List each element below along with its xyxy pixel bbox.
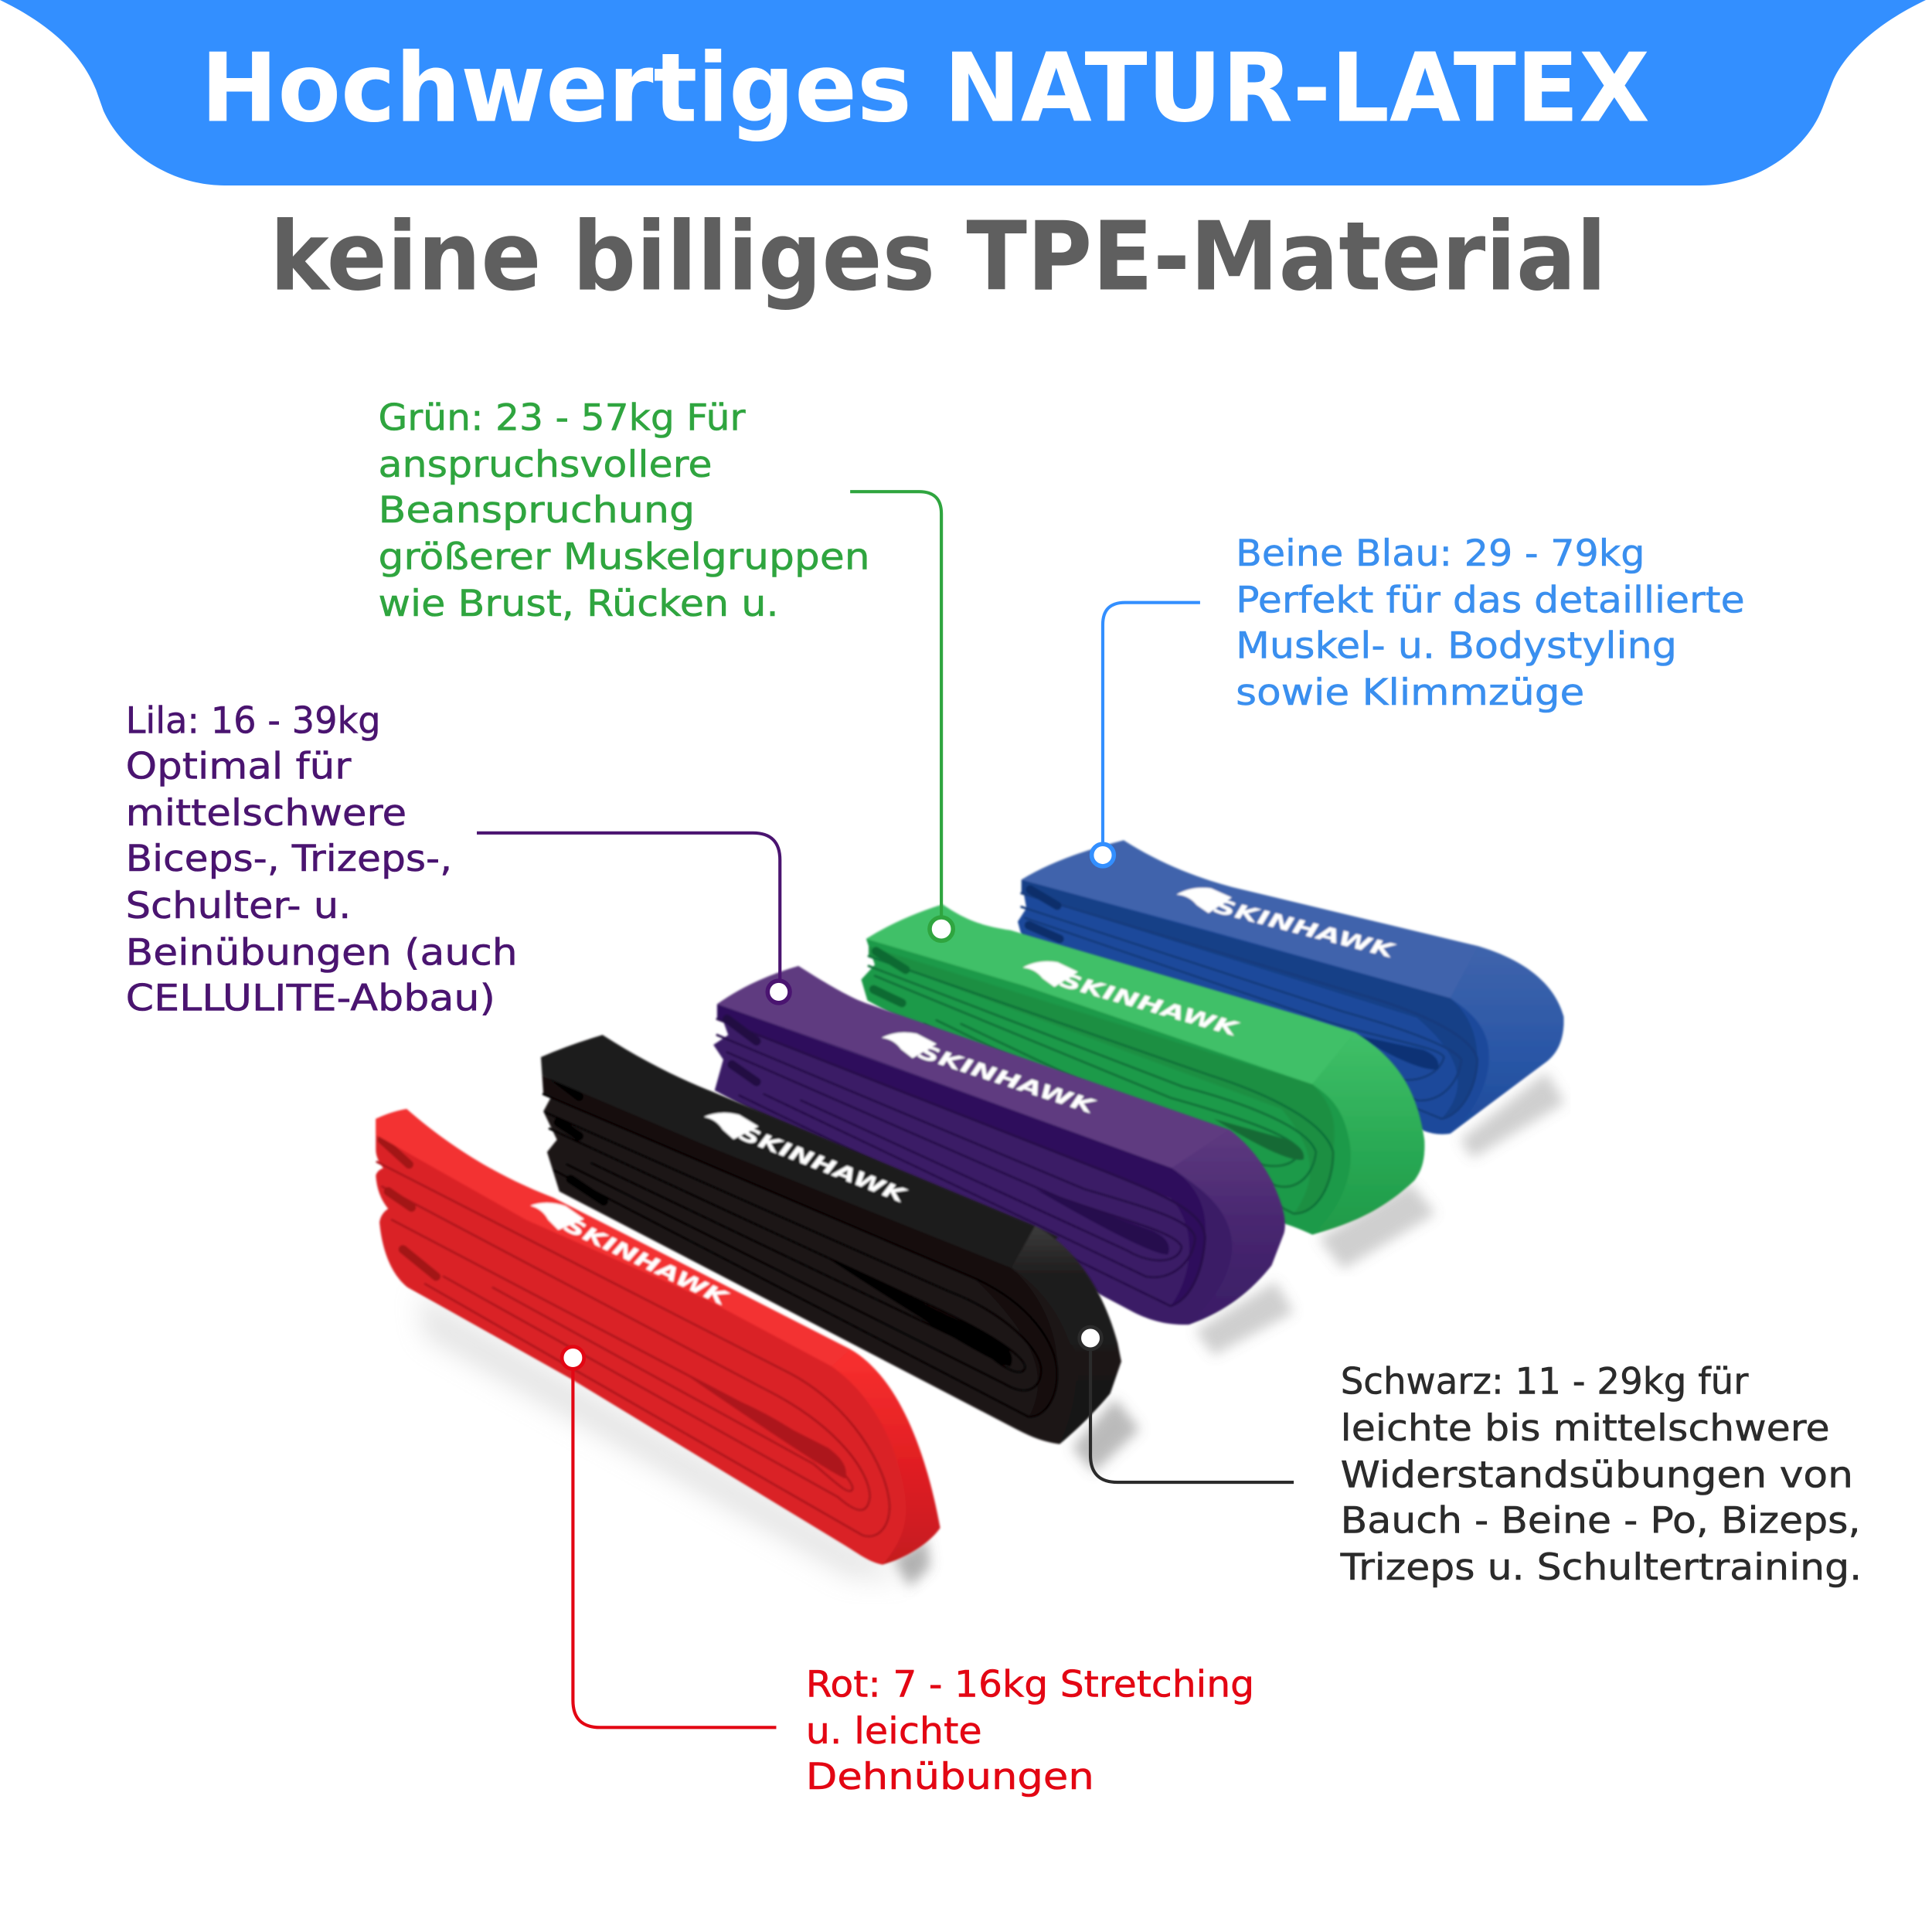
logo: green (1019, 954, 1243, 1042)
callout: red: Rot: 7 - 16kg Stretching (806, 1663, 1254, 1706)
logo: blue: SKINHAWK (1212, 894, 1399, 964)
callout: green: wie Brust, Rücken u. (378, 583, 779, 625)
logo: purple (878, 1024, 1100, 1120)
callout: blue: sowie Klimmzüge (1236, 672, 1584, 714)
callout: black (1340, 1360, 1862, 1589)
band: black (541, 1035, 1140, 1472)
logo: blue (1173, 880, 1400, 964)
band: purple (713, 966, 1294, 1355)
callout: purple: Schulter- u. (126, 885, 351, 927)
logo: black: SKINHAWK (736, 1121, 910, 1209)
callout: green: Grün: 23 - 57kg Für (378, 396, 746, 439)
title: Hochwertiges NATUR-LATEX (201, 32, 1650, 143)
header banner (0, 0, 1926, 185)
callout: green (378, 396, 870, 625)
logo: red (525, 1192, 735, 1311)
callout: black: Trizeps u. Schultertraining. (1340, 1546, 1862, 1589)
subtitle: keine billiges TPE-Material (270, 202, 1607, 312)
callout: purple: Beinübungen (auch (126, 931, 518, 974)
callout: purple: Lila: 16 - 39kg (126, 700, 381, 743)
callout: blue: Beine Blau: 29 - 79kg (1236, 532, 1645, 575)
band: red (376, 1109, 940, 1587)
band: blue (1018, 840, 1565, 1158)
callout: green: anspruchsvollere (378, 444, 713, 486)
callout: blue: Muskel- u. Bodystyling (1236, 624, 1677, 667)
logo: red: SKINHAWK (560, 1213, 733, 1311)
callout: purple (126, 700, 518, 1019)
callout: red: u. leichte (806, 1710, 982, 1753)
callout: red (806, 1663, 1254, 1798)
callout: red: Dehnübungen (806, 1756, 1094, 1798)
callout: black: Bauch - Beine - Po, Bizeps, (1341, 1499, 1861, 1542)
logo: green: SKINHAWK (1057, 968, 1243, 1042)
callout: blue (1236, 532, 1745, 714)
leader line: purple (477, 833, 790, 1003)
logo: black (699, 1103, 913, 1209)
callout: purple: Biceps-, Trizeps-, (126, 838, 452, 880)
callout: black: leichte bis mittelschwere (1341, 1407, 1830, 1450)
callout: green: Beanspruchung (378, 489, 695, 532)
callout: blue: Perfekt für das detaillierte (1236, 579, 1745, 621)
band: green (861, 904, 1435, 1269)
callout: black: Schwarz: 11 - 29kg für (1341, 1360, 1749, 1403)
callout: purple: CELLULITE-Abbau) (126, 977, 495, 1019)
leader line: green (850, 492, 953, 940)
callout: purple: Optimal für (126, 746, 352, 788)
logo: purple: SKINHAWK (915, 1040, 1100, 1120)
callout: purple: mittelschwere (126, 792, 406, 835)
callout: black: Widerstandsübungen von (1341, 1454, 1853, 1496)
leader line: red (562, 1347, 776, 1727)
callout: green: größerer Muskelgruppen (378, 536, 870, 579)
leader line: black (1080, 1327, 1294, 1482)
leader line: blue (1092, 603, 1200, 866)
